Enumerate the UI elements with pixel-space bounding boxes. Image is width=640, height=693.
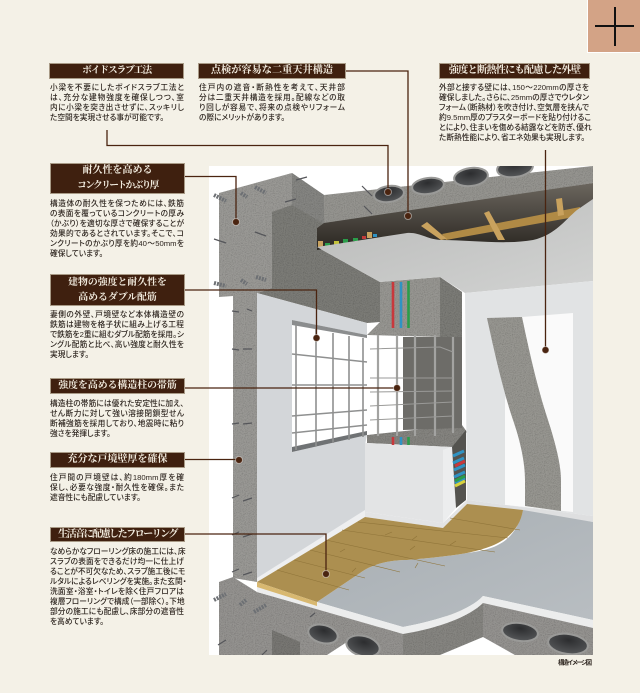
- text: ダブル配筋: で鉄筋を2重に組むダブル配筋を採用。シ: [50, 330, 184, 339]
- text: かぶり厚: 効果的であるとされています。そこで、コ: [50, 229, 184, 238]
- text: かぶり厚: 確保しています。: [50, 249, 103, 258]
- building cutaway illustration: [106, 70, 593, 666]
- heading: 外壁: [439, 63, 590, 79]
- floor notch: [440, 637, 515, 655]
- text: ダブル配筋: 妻側の外壁、戸境壁など本体構造壁の: [50, 310, 184, 319]
- text: ボイドスラブ工法: 内に小梁を突き出させずに、スッキリし: [50, 103, 184, 112]
- text: かぶり厚: 構造体の耐久性を保つためには、鉄筋: [50, 199, 184, 208]
- corner plus icon: [587, 0, 640, 53]
- text: 外壁: フォーム（断熱材）を吹き付け、空気層を挟んで: [439, 103, 589, 112]
- white picture background: [209, 166, 593, 655]
- heading: 戸境壁厚: [50, 452, 185, 468]
- heading: 外壁: 強度と断熱性にも配慮した外壁: [449, 65, 580, 76]
- heading: ダブル配筋: 高めるダブル配筋: [78, 292, 157, 303]
- heading: 二重天井構造: 点検が容易な二重天井構造: [211, 65, 333, 76]
- text: 戸境壁厚: 保し、必要な強度・耐久性を確保。また: [50, 483, 184, 492]
- text: 帯筋: 構造柱の帯筋には優れた安定性に加え、: [50, 399, 184, 408]
- heading: 帯筋: 強度を高める構造柱の帯筋: [58, 380, 177, 391]
- text: かぶり厚: [50, 199, 184, 258]
- text: フローリング: ることが不可欠なため、スラブ施工後にモ: [50, 567, 185, 576]
- heading: コンクリートかぶり厚: コンクリートかぶり厚: [77, 180, 158, 190]
- leader dots: [232, 188, 549, 578]
- text: かぶり厚: の表面を覆っているコンクリートの厚み: [50, 209, 184, 218]
- right wall with insulation layers: [465, 281, 593, 516]
- heading: 二重天井構造: [198, 63, 346, 79]
- heading: ボイドスラブ工法: ボイドスラブ工法: [82, 65, 151, 76]
- text: ボイドスラブ工法: [50, 82, 184, 122]
- heading: 戸境壁厚: 充分な戸境壁厚を確保: [68, 454, 168, 465]
- heading: ダブル配筋: 建物の強度と耐久性を: [68, 277, 167, 288]
- lower column block and pipes: [365, 430, 466, 523]
- flooring: [257, 500, 593, 634]
- riser pipes: [393, 281, 408, 445]
- text: フローリング: ルタルによるレベリングを実施。また玄関・: [50, 577, 186, 586]
- text: フローリング: 洗面室・浴室・トイレを除く住戸フロアは: [50, 587, 184, 596]
- text: フローリング: なめらかなフローリング床の施工には、床: [50, 547, 186, 556]
- rebar cage: [292, 325, 462, 450]
- text: 二重天井構造: [199, 83, 345, 122]
- text: 外壁: [439, 83, 592, 142]
- heading: フローリング: 生活音に配慮したフローリング: [58, 529, 177, 540]
- text: 帯筋: せん断力に対して強い溶接閉鎖型せん: [50, 409, 184, 418]
- text: 戸境壁厚: [50, 473, 184, 502]
- ceiling panel: [317, 199, 593, 293]
- text: ボイドスラブ工法: は、充分な建物強度を確保しつつ、室: [50, 93, 184, 102]
- anchor bars: [214, 176, 372, 655]
- leader lines: [107, 71, 546, 574]
- text: フローリング: スラブの表面をできるだけ均一に仕上げ: [50, 557, 184, 566]
- text: ダブル配筋: 鉄筋は建物を格子状に組み上げる工程: [50, 320, 184, 329]
- text: 帯筋: [50, 399, 184, 438]
- heading: ダブル配筋: [50, 274, 185, 306]
- text: 外壁: 約9.5mm厚のプラスターボードを貼り付けるこ: [439, 113, 591, 122]
- text: 外壁: 外部と接する壁には、150～220mmの厚さを: [439, 83, 589, 92]
- text: 二重天井構造: の際にメリットがあります。: [199, 113, 285, 122]
- text: 戸境壁厚: 遮音性にも配慮しています。: [50, 493, 141, 502]
- text: 二重天井構造: 分は二重天井構造を採用。配線などの取: [199, 93, 345, 102]
- text: フローリング: [50, 547, 186, 626]
- text: 戸境壁厚: 住戸間の戸境壁は、約180mm厚を確: [50, 473, 184, 482]
- concrete holes: [306, 157, 589, 660]
- text: ボイドスラブ工法: た空間を実現させる事が可能です。: [50, 113, 164, 122]
- text: 帯筋: 断補強筋を採用しており、地震時に粘り: [50, 419, 184, 428]
- text: フローリング: 複層フローリングで構成（一部除く）。下地: [50, 597, 185, 606]
- text: フローリング: 部分の施工にも配慮し、床部分の遮音性: [50, 607, 184, 616]
- heading: 帯筋: [50, 378, 185, 394]
- caption: 構造イメージ図: 構造イメージ図: [558, 658, 592, 666]
- text: ダブル配筋: ングル配筋と比べ、高い強度と耐久性を: [50, 340, 184, 349]
- text: 帯筋: 強さを発揮します。: [50, 429, 111, 438]
- text: 外壁: た断熱性能により、省エネ効果も実現します。: [439, 133, 585, 142]
- concrete structure: [219, 166, 593, 655]
- text: ダブル配筋: 実現します。: [50, 350, 89, 359]
- heading: フローリング: [50, 527, 185, 542]
- text: 二重天井構造: り回しが容易で、将来の点検やリフォーム: [199, 103, 345, 112]
- text: ダブル配筋: [50, 310, 184, 359]
- text: かぶり厚: （かぶり）を適切な厚さで確保することが: [50, 219, 184, 228]
- text: 二重天井構造: 住戸内の遮音・断熱性を考えて、天井部: [199, 83, 345, 92]
- ceiling void and wooden joists: [317, 183, 593, 250]
- text: 外壁: とにより、住まいを傷める結露などを防ぎ、優れ: [439, 123, 592, 132]
- text: かぶり厚: ンクリートのかぶり厚を約40～50mmを: [50, 239, 184, 248]
- text: ボイドスラブ工法: 小梁を不要にしたボイドスラブ工法と: [50, 83, 184, 92]
- heading: ボイドスラブ工法: [49, 63, 184, 79]
- text: 外壁: 確保しました。さらに、25mmの厚さでウレタン: [439, 93, 589, 102]
- heading: コンクリートかぶり厚: [50, 163, 185, 194]
- window opening and wall: [257, 293, 367, 582]
- text: フローリング: を高めています。: [50, 617, 104, 626]
- heading: コンクリートかぶり厚: 耐久性を高める: [82, 165, 152, 176]
